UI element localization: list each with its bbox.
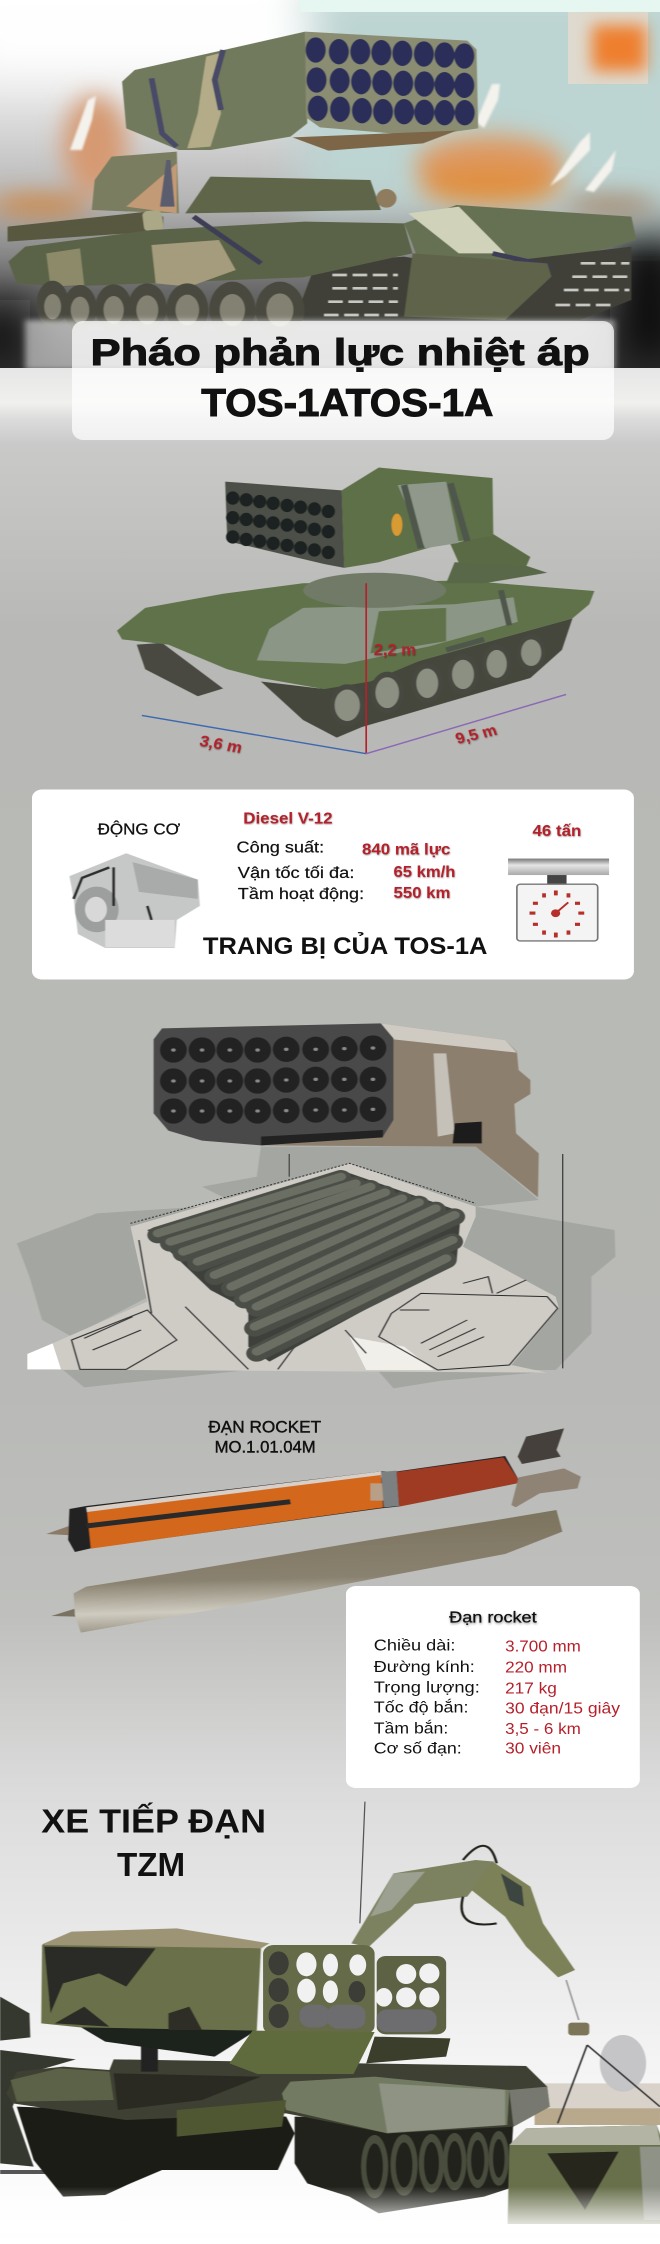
rear deck (404, 205, 636, 267)
spec: top speed: Vận tốc tối đa: (238, 863, 354, 881)
specs rows: 217 kg (505, 1679, 557, 1697)
intact rocket (51, 1510, 562, 1633)
title panel (72, 321, 614, 440)
engine type: Diesel V-12 (243, 810, 333, 827)
specs rows: 30 đạn/15 giây (505, 1699, 620, 1717)
launcher side (122, 32, 307, 150)
specs rows: Tốc độ bắn: (374, 1698, 468, 1716)
snow fade (0, 2187, 660, 2233)
vehicle heading: TZM (117, 1847, 185, 1884)
specs rows: Trọng lượng: (374, 1679, 480, 1696)
stowed rocket container (41, 1928, 269, 2072)
rear support (92, 152, 179, 213)
gun barrel (8, 212, 163, 242)
weight value: 46 tấn (532, 822, 581, 839)
crew (376, 189, 397, 208)
width label: 3,6 m (198, 732, 244, 757)
hero illustration: TOS-1A firing (0, 0, 660, 446)
tank model (117, 468, 594, 738)
cutaway: rockets inside launcher (17, 1023, 615, 1388)
icon: blurred orange square top right (568, 12, 648, 84)
TZM reloading vehicle photo (0, 1802, 660, 2233)
title text (90, 333, 590, 425)
spec: power: 840 mã lực (362, 841, 450, 858)
specs rows: Tầm bắn: (374, 1718, 448, 1737)
rocket heading: ĐẠN ROCKET (208, 1417, 321, 1436)
spec: range (238, 884, 450, 903)
specs rows: 30 viên (505, 1739, 561, 1757)
specs rows: Cơ số đạn: (374, 1739, 462, 1757)
vehicle hull (6, 2059, 550, 2137)
vehicle drawing (8, 32, 636, 370)
road wheels (37, 281, 304, 338)
fire clouds (0, 95, 655, 215)
specs rows: Chiều dài: (374, 1637, 455, 1654)
launcher module (154, 1023, 539, 1197)
rocket heading: MO.1.01.04M (215, 1438, 316, 1456)
spec: top speed (238, 863, 455, 881)
spec: power: Công suất: (237, 838, 324, 856)
specs rows (374, 1637, 620, 1757)
specs rows: 3.700 mm (505, 1638, 581, 1655)
vehicle heading: XE TIẾP ĐẠN (41, 1802, 266, 1841)
front hull (8, 222, 413, 287)
title text: TOS-1ATOS-1A (201, 381, 493, 425)
spec: range: 550 km (394, 884, 450, 901)
snowy ground (0, 368, 660, 446)
spec: range: Tầm hoạt động: (238, 884, 364, 903)
panel heading: TRANG BỊ CỦA TOS-1A (203, 932, 487, 959)
vehicle heading (41, 1802, 266, 1884)
rocket racks (229, 1945, 450, 2074)
rocket section (46, 1417, 640, 1788)
specs rows: Đường kính: (374, 1658, 475, 1676)
length label: 9,5 m (453, 721, 499, 747)
road wheels (330, 634, 546, 726)
distant background (0, 1997, 660, 2174)
spec: top speed: 65 km/h (394, 864, 455, 881)
specs rows: 220 mm (505, 1659, 567, 1676)
panel: engine and weight specs (32, 789, 634, 980)
tracks (295, 247, 631, 320)
dimension lines (142, 583, 566, 754)
antenna (360, 1802, 365, 1923)
specs rows: 3,5 - 6 km (505, 1720, 581, 1738)
tracks and wheels (17, 2107, 514, 2213)
vehicle dimensions diagram (117, 468, 594, 757)
rocket bundle (147, 1172, 461, 1362)
panel: rocket specs (346, 1586, 640, 1788)
title text: Pháo phản lực nhiệt áp (90, 333, 590, 374)
specs heading: Đạn rocket (449, 1609, 537, 1626)
icon: engine (69, 853, 200, 948)
rocket heading (208, 1417, 321, 1456)
cutaway rocket (46, 1428, 581, 1552)
engine label: ĐỘNG CƠ (98, 821, 181, 838)
crane (351, 1846, 660, 2123)
turret (185, 177, 381, 213)
line drawing of tank interior (27, 1163, 559, 1373)
ghost tank (17, 1147, 615, 1388)
rocket trails (70, 84, 616, 192)
detached container on ground (508, 2125, 660, 2224)
icon: weighing scale (508, 859, 609, 941)
spec: power (237, 838, 450, 858)
height label: 2,2 m (374, 642, 416, 659)
launcher front (305, 32, 478, 136)
snow haze (25, 320, 615, 370)
